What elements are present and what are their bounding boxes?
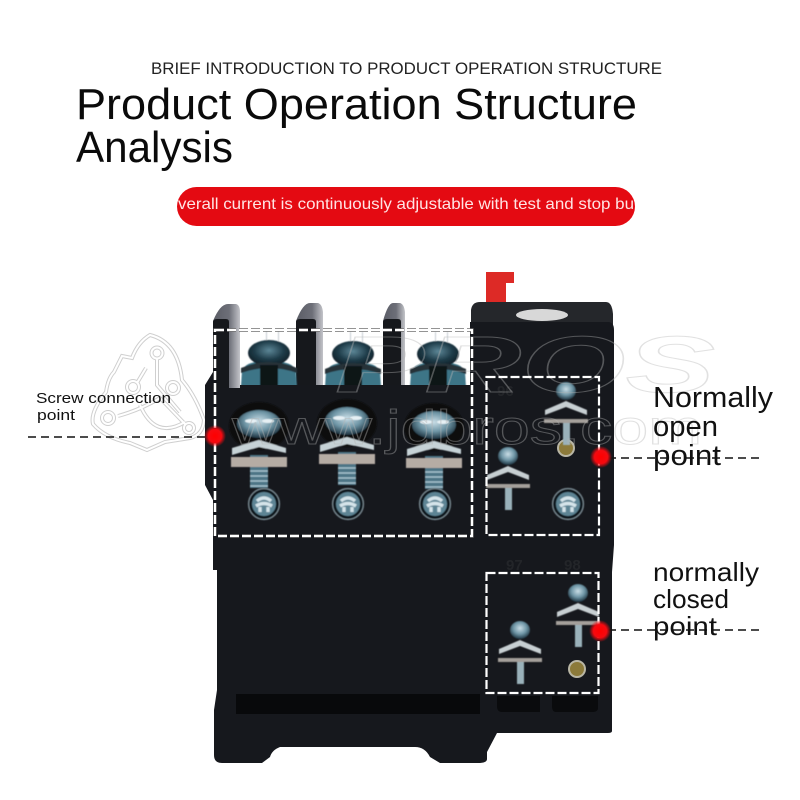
label: normally open point: Normally [653,382,774,414]
red banner: verall current is continuously adjustable with test and stop bu [178,196,634,213]
leader line: normally open [608,457,762,459]
label: normally closed point: normally [653,557,759,587]
dashed box: normally open [486,377,599,535]
label: normally closed point: closed [653,584,729,614]
label: normally closed point: point [653,611,718,641]
housing lip over top screws [240,385,471,390]
terminal tabs [213,303,472,392]
terminal numbers: 98 [564,557,581,574]
label: screw connection point: Screw connection [36,390,171,407]
marker: screw connection [204,425,226,447]
relay body [205,272,614,763]
label: normally open point: open [653,411,718,443]
leader line: normally closed [608,629,762,631]
lower channels [497,696,598,712]
dashed box: normally closed [486,573,598,693]
watermark wordmark [231,320,715,455]
contact screws [486,382,600,684]
title: Analysis [76,123,233,172]
watermark wordmark: www.jdbros.com [231,402,702,455]
subtitle: BRIEF INTRODUCTION TO PRODUCT OPERATION STRUCTURE [151,59,662,78]
marker: normally closed [589,620,611,642]
red test lever [486,272,514,322]
title: Product Operation Structure [76,80,637,129]
terminal numbers: 97 [506,557,523,574]
leader line: screw connection [28,436,207,438]
label: normally open point: point [653,440,721,472]
watermark logo [93,335,204,450]
terminal numbers: 96 [497,383,514,400]
dashed box: screw terminals [215,330,472,536]
marker: normally open [590,446,612,468]
watermark wordmark: PROS [335,320,715,409]
middle screws [229,399,464,489]
title [76,80,637,172]
bottom screws [248,488,450,520]
top cap [471,302,613,330]
label: normally closed point [653,557,759,641]
label: screw connection point [36,390,171,424]
red banner [177,187,635,226]
label: normally open point [653,382,774,472]
top screws [241,331,466,388]
label: screw connection point: point [37,407,76,424]
base shadow [236,694,480,714]
terminal numbers [497,383,581,574]
brass rings [558,440,585,677]
main housing [205,322,614,763]
